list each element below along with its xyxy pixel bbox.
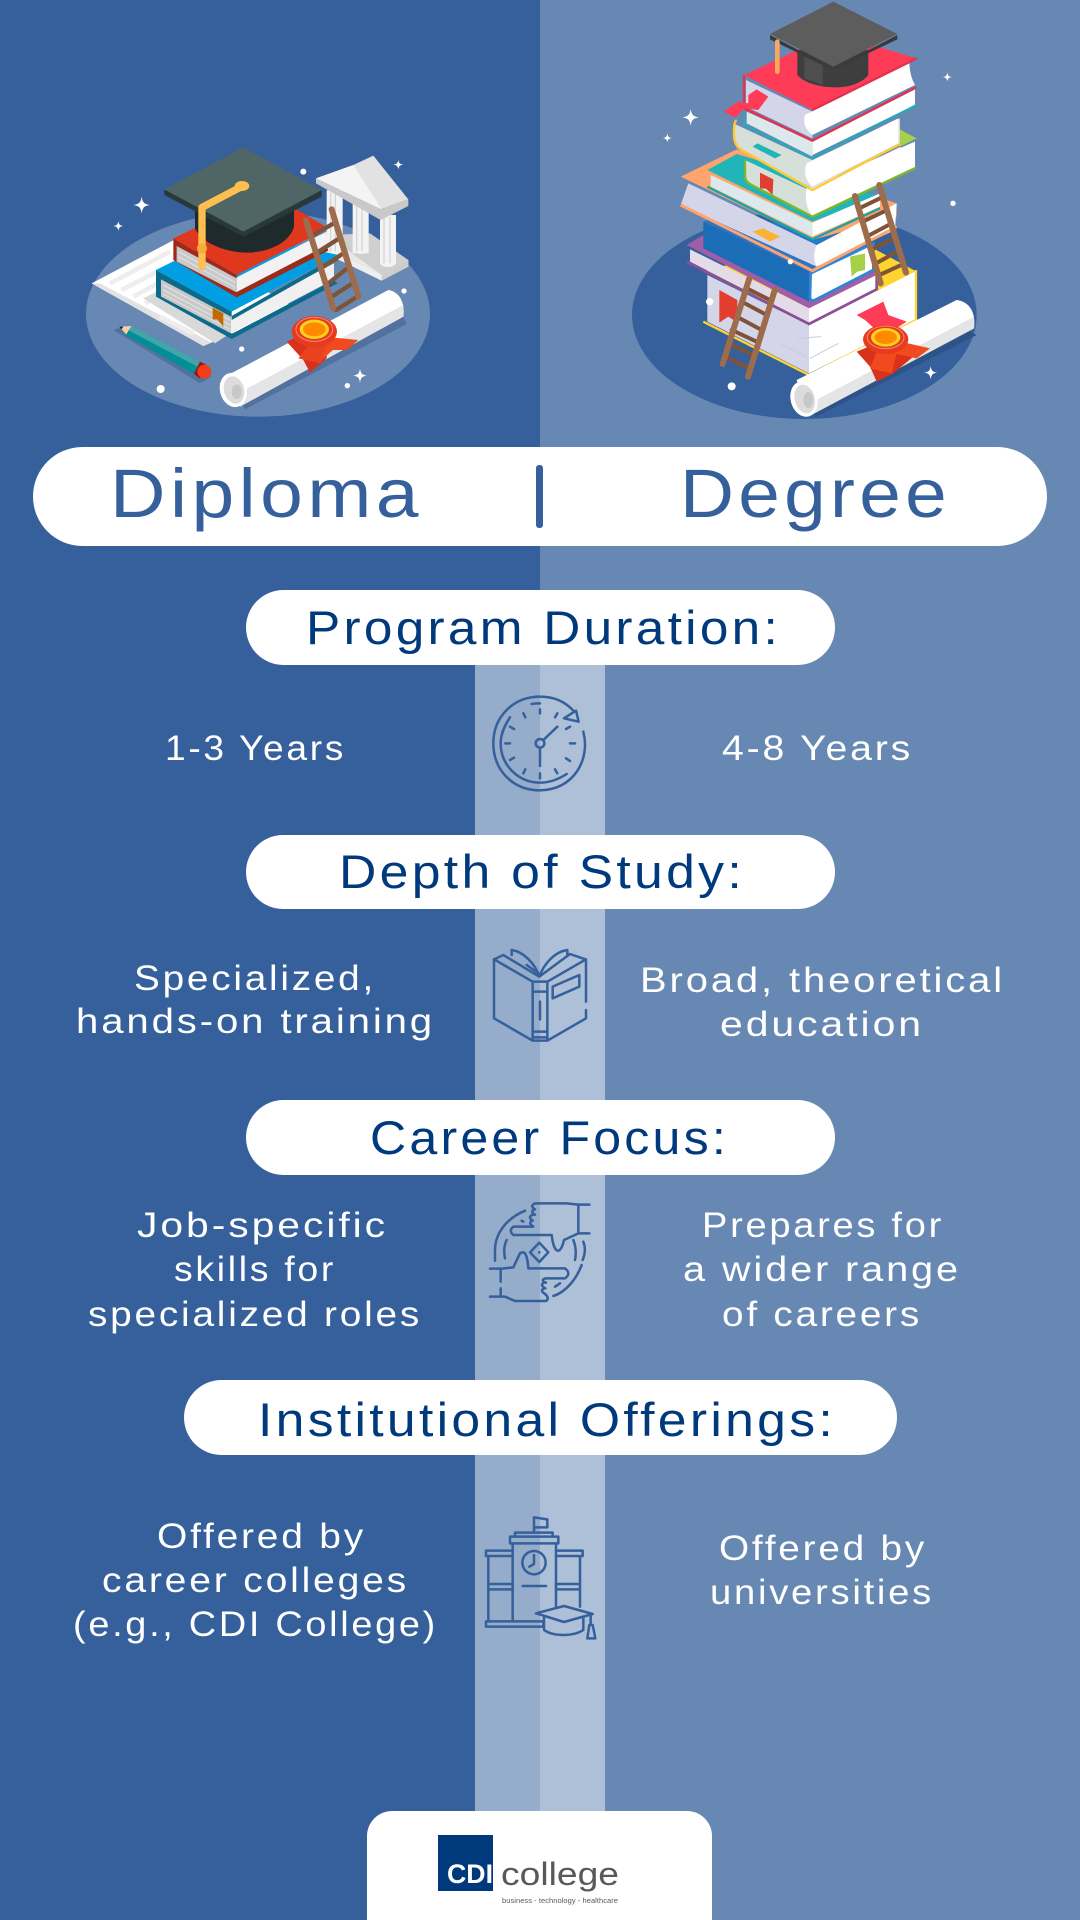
text: diploma duration: 1-3 Years xyxy=(165,729,346,768)
lower ladder xyxy=(723,278,775,377)
ladder xyxy=(306,209,358,310)
seal and ribbon xyxy=(287,316,358,373)
section pill: Depth of Study xyxy=(246,835,835,909)
scroll xyxy=(786,300,977,420)
purple book xyxy=(687,235,877,324)
text: diploma depth xyxy=(76,959,435,1041)
shadows xyxy=(240,317,407,409)
section pill: Career Focus xyxy=(246,1100,835,1175)
teal book xyxy=(707,154,880,239)
illustration: diploma books with cap xyxy=(86,147,430,417)
logo: CDI college xyxy=(367,1811,712,1920)
lower book xyxy=(156,232,338,339)
icon: handshake target xyxy=(490,1203,589,1301)
text: diploma offerings xyxy=(73,1517,438,1644)
text: degree career: of careers xyxy=(722,1295,922,1334)
small teal book xyxy=(744,87,917,158)
heading: Degree: Degree xyxy=(680,455,951,532)
text: diploma depth: hands-on training xyxy=(76,1002,435,1041)
text: diploma depth: Specialized, xyxy=(134,959,376,998)
center strip xyxy=(475,660,605,1820)
section pill: Career Focus: Career Focus: xyxy=(370,1111,729,1164)
text: diploma career xyxy=(88,1206,422,1334)
text: degree offerings: universities xyxy=(710,1573,934,1612)
upper ladder xyxy=(855,185,906,283)
section pill: Institutional Offerings xyxy=(184,1380,897,1455)
text: degree career xyxy=(683,1206,961,1334)
yellow book xyxy=(733,118,900,190)
text: diploma career: specialized roles xyxy=(88,1295,422,1334)
upper book xyxy=(173,206,328,297)
paper xyxy=(92,239,293,346)
section pill: Depth of Study: Depth of Study: xyxy=(339,845,745,898)
text: degree depth xyxy=(640,961,1005,1044)
section pill: Program Duration xyxy=(246,590,835,665)
scroll xyxy=(216,290,404,410)
sparkles and dots xyxy=(113,160,407,393)
section pill: Institutional Offerings: Institutional Offerings: xyxy=(258,1393,836,1446)
pencil xyxy=(119,326,211,379)
section pill: Program Duration: Program Duration: xyxy=(306,601,781,654)
blue book xyxy=(703,213,873,302)
text: degree career: Prepares for xyxy=(702,1206,944,1245)
text: degree offerings: Offered by xyxy=(719,1529,927,1568)
icon: school building xyxy=(486,1517,595,1638)
text: degree career: a wider range xyxy=(683,1250,961,1289)
background: left panel xyxy=(0,0,540,1920)
text: diploma offerings: Offered by xyxy=(157,1517,366,1556)
orange book xyxy=(681,149,897,271)
text: diploma career: skills for xyxy=(174,1250,336,1289)
text: degree offerings xyxy=(710,1529,934,1612)
temple xyxy=(316,156,408,281)
text: degree duration: 4-8 Years xyxy=(722,729,913,768)
bottom book xyxy=(703,248,917,375)
logo: CDI college: college xyxy=(501,1856,619,1892)
graduation cap xyxy=(770,2,897,87)
green book xyxy=(744,125,917,217)
text: degree depth: Broad, theoretical xyxy=(640,961,1005,1000)
divider xyxy=(536,465,543,528)
background: right panel xyxy=(540,0,1080,1920)
sparkles and dots xyxy=(663,72,956,390)
text: diploma offerings: (e.g., CDI College) xyxy=(73,1605,438,1644)
icon: open book xyxy=(494,950,586,1041)
logo: CDI college: CDI xyxy=(447,1859,493,1889)
seal and ribbon xyxy=(857,325,930,382)
icon: clock xyxy=(493,697,585,790)
text: diploma career: Job-specific xyxy=(137,1206,388,1245)
illustration: degree book stack xyxy=(632,2,977,420)
text: degree depth: education xyxy=(720,1005,924,1044)
text: diploma offerings: career colleges xyxy=(102,1561,409,1600)
graduation cap xyxy=(164,147,322,267)
heading: Diploma: Diploma xyxy=(110,455,423,532)
title bar xyxy=(33,447,1047,546)
top red book xyxy=(723,33,917,141)
logo: CDI college: business - technology - healthcare xyxy=(502,1896,618,1905)
